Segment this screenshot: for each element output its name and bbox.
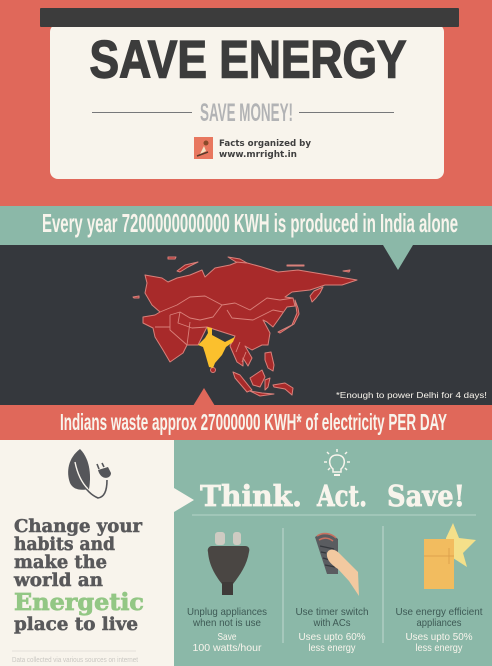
waste notch [193, 388, 215, 406]
panel: waste banner [0, 405, 492, 440]
column: unplug [187, 606, 267, 654]
column: timer: less energy [308, 642, 356, 654]
map of Asia [133, 257, 357, 396]
column: efficient [396, 606, 483, 654]
panel: think act save [174, 440, 492, 666]
credit text: www.mrright.in [219, 150, 297, 160]
heading: Save! [387, 479, 465, 513]
column: unplug: Save [218, 631, 237, 643]
dark top bar [40, 8, 459, 27]
column: efficient: Uses upto 50% [406, 631, 472, 643]
map footnote: *Enough to power Delhi for 4 days! [336, 391, 487, 400]
panel: left message [0, 440, 174, 666]
heading: Act. [316, 479, 367, 513]
source note [12, 651, 138, 664]
column: efficient: Use energy efficient [396, 606, 483, 618]
source note: Data collected via various sources on internet [12, 657, 138, 664]
India highlight [198, 327, 235, 368]
card [50, 24, 444, 179]
icon: light bulb [324, 449, 350, 475]
icon: hand and remote [315, 534, 359, 596]
column: timer: Uses upto 60% [298, 631, 366, 643]
subtitle: SAVE MONEY! [200, 99, 293, 127]
column: efficient: appliances [416, 617, 462, 629]
column: timer: Use timer switch [296, 606, 369, 618]
heading [200, 479, 465, 513]
column: unplug: when not is use [192, 617, 261, 629]
message text [13, 517, 144, 635]
pointer [174, 488, 194, 512]
column: unplug: 100 watts/hour [192, 642, 262, 654]
heading: Think. [200, 479, 302, 513]
message text: make the [14, 553, 107, 573]
icon: fridge and star [424, 523, 476, 589]
panel: header [0, 0, 492, 206]
country borders [155, 296, 293, 362]
message text: place to live [14, 615, 138, 635]
banner notch [383, 245, 413, 270]
logo [194, 137, 213, 159]
credit text [219, 139, 311, 160]
column: efficient: less energy [416, 642, 463, 654]
title: SAVE ENERGY [90, 30, 406, 90]
column: timer: with ACs [313, 617, 350, 629]
column: timer [296, 606, 369, 654]
message text: world an [13, 571, 103, 591]
column: unplug: Unplug appliances [187, 606, 267, 618]
message text: habits and [14, 535, 115, 555]
icon: leaf and plug [68, 449, 111, 498]
panel: map [0, 245, 492, 406]
message text: Change your [14, 517, 143, 537]
icon: plug [208, 532, 249, 595]
message text: Energetic [14, 589, 144, 616]
credit text: Facts organized by [219, 139, 311, 149]
